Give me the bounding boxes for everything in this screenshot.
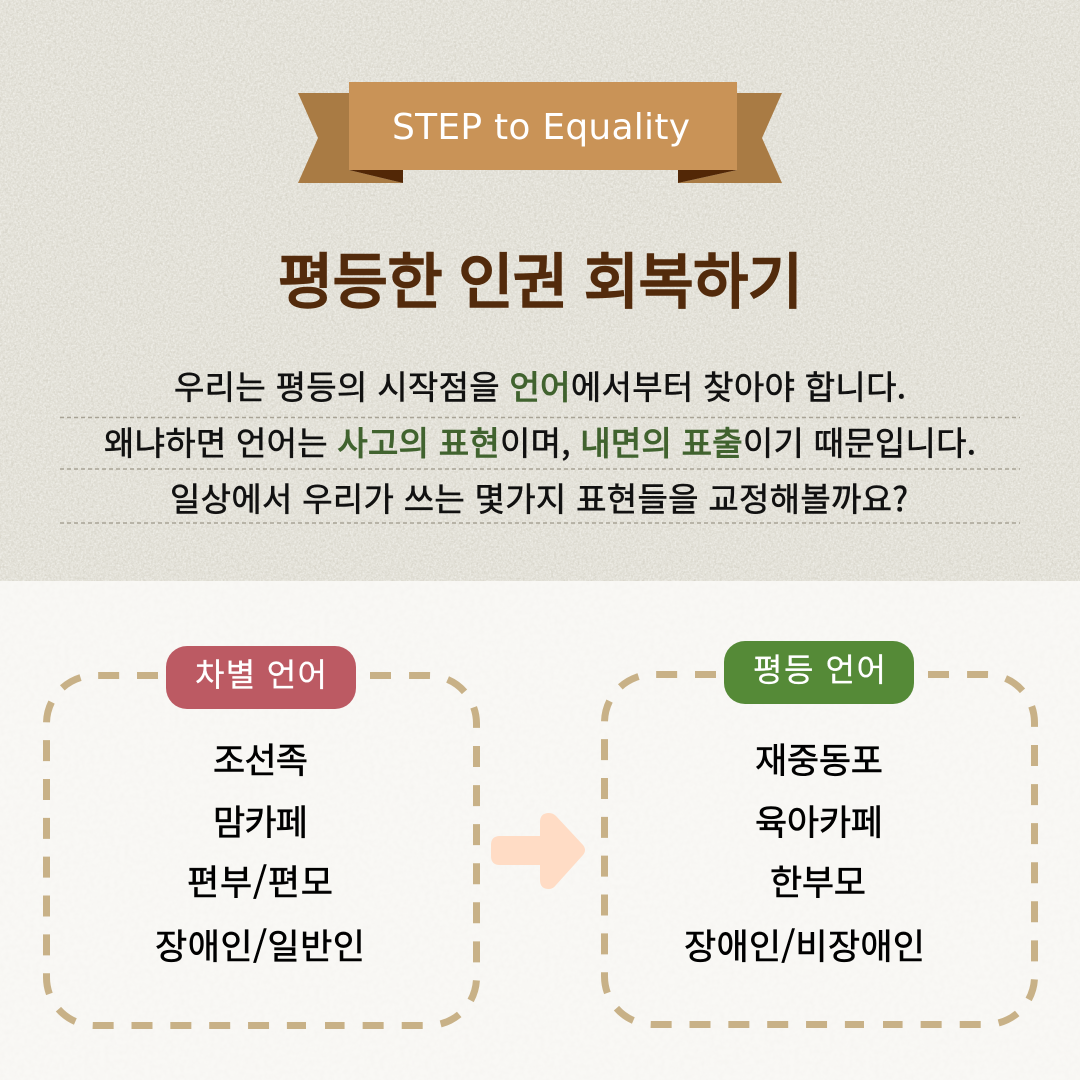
ribbon left tail (298, 93, 403, 183)
term 2: 육아카페 (755, 795, 883, 846)
term 4: 장애인/일반인 (155, 919, 365, 970)
pill: discriminatory heading: 차별 언어 (195, 650, 327, 696)
panel: equal language (604, 641, 1034, 1024)
intro text block (104, 361, 976, 521)
list: discriminatory terms (155, 733, 365, 970)
panel: light bottom background (0, 581, 1080, 1080)
ribbon banner (298, 82, 782, 183)
term 4: 장애인/비장애인 (684, 919, 925, 970)
arrow (491, 813, 585, 889)
pill: equal heading: 평등 언어 (753, 645, 886, 691)
term 2: 맘카페 (213, 795, 308, 846)
term 1: 재중동포 (755, 733, 883, 784)
intro line 3: 일상에서 우리가 쓰는 몇가지 표현들을 교정해볼까요? (170, 473, 908, 521)
intro line 2: 왜냐하면 언어는 사고의 표현이며, 내면의 표출이기 때문입니다. (104, 417, 976, 465)
panel: textured top background (0, 0, 1080, 581)
term 3: 한부모 (770, 855, 866, 906)
panel: discriminatory language (46, 646, 477, 1026)
ribbon left fold (349, 170, 403, 183)
term 3: 편부/편모 (187, 855, 333, 906)
pill: equal heading (724, 641, 914, 704)
ribbon label: STEP to Equality (392, 107, 690, 148)
ribbon right tail (678, 93, 782, 183)
term 1: 조선족 (213, 733, 308, 784)
ribbon main band (349, 82, 737, 170)
title: 평등한 인권 회복하기 (278, 234, 803, 321)
pill: discriminatory heading (166, 646, 356, 709)
dashed frame right (604, 674, 1034, 1024)
dashed frame left (46, 676, 477, 1026)
intro line 1: 우리는 평등의 시작점을 언어에서부터 찾아야 합니다. (174, 361, 906, 409)
ribbon right fold (678, 170, 737, 183)
list: equal terms (684, 733, 925, 970)
